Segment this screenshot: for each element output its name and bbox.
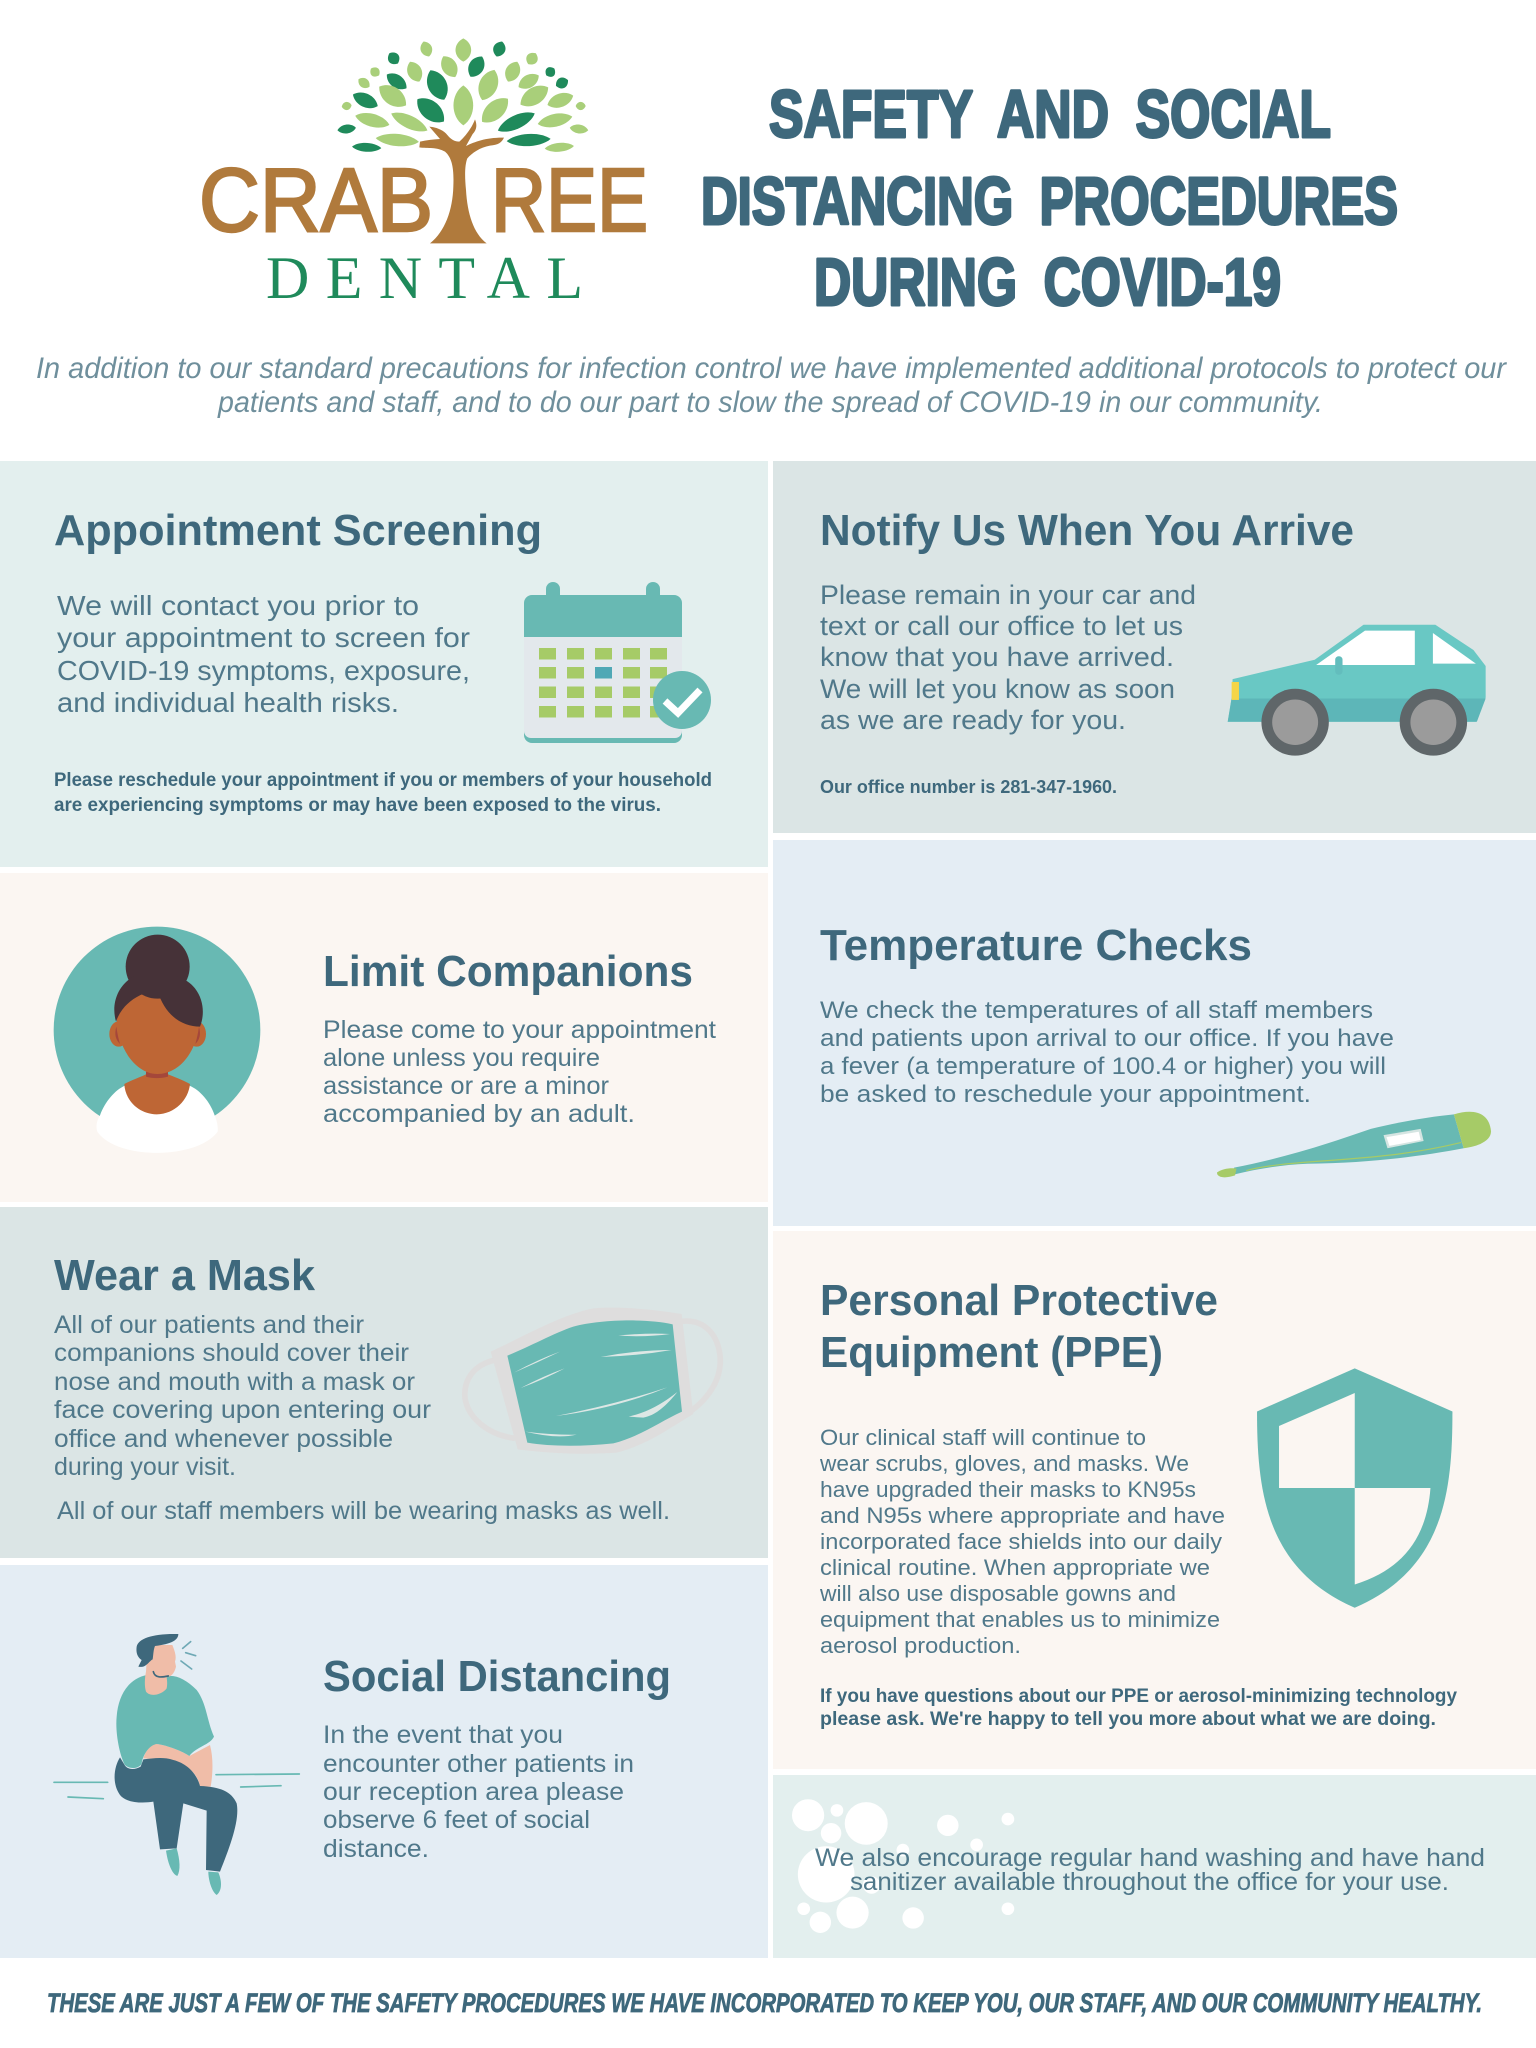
body text: and N95s where appropriate and have <box>820 1503 1225 1528</box>
body text <box>819 1425 1225 1658</box>
note text <box>820 1686 1457 1730</box>
heading <box>820 1276 1218 1377</box>
body text: equipment that enables us to minimize <box>820 1607 1220 1632</box>
icon: calendar with check mark <box>524 582 711 743</box>
body text: alone unless you require <box>323 1044 600 1072</box>
body text <box>815 1844 1485 1896</box>
title: SAFETY AND SOCIAL <box>769 77 1331 152</box>
logo: Crabtree Dental <box>199 38 648 311</box>
heading: Wear a Mask <box>54 1251 316 1300</box>
body text: face covering upon entering our <box>54 1396 431 1424</box>
title: DURING COVID-19 <box>814 245 1281 320</box>
icon: tree trunk <box>419 119 504 243</box>
icon: thermometer <box>1217 1112 1491 1177</box>
body text: during your visit. <box>54 1453 236 1481</box>
icon: woman portrait <box>54 927 260 1153</box>
body text: assistance or are a minor <box>323 1072 609 1100</box>
panel: wear a mask <box>0 1207 768 1558</box>
note text: Please reschedule your appointment if you or members of your household <box>54 770 712 791</box>
body text <box>820 580 1196 735</box>
panel: hand washing <box>773 1775 1536 1958</box>
body text: your appointment to screen for <box>57 622 470 653</box>
heading: Personal Protective <box>820 1276 1218 1325</box>
panel: temperature checks <box>773 840 1536 1226</box>
body text: We also encourage regular hand washing and have hand <box>815 1844 1485 1872</box>
body text: We check the temperatures of all staff members <box>820 997 1373 1024</box>
body text: incorporated face shields into our daily <box>820 1529 1223 1554</box>
panel: social distancing <box>0 1565 768 1958</box>
panel: limit companions <box>0 873 768 1202</box>
body text: text or call our office to let us <box>820 611 1183 641</box>
panel: appointment screening <box>0 461 768 867</box>
heading: Social Distancing <box>323 1652 671 1701</box>
body text: We will contact you prior to <box>57 590 419 621</box>
body text: wear scrubs, gloves, and masks. We <box>819 1451 1189 1476</box>
body text: know that you have arrived. <box>820 642 1174 672</box>
note text <box>54 770 712 816</box>
panel: personal protective equipment <box>773 1231 1536 1769</box>
body text: be asked to reschedule your appointment. <box>820 1081 1311 1108</box>
heading: Limit Companions <box>323 947 693 996</box>
note text: are experiencing symptoms or may have been exposed to the virus. <box>54 795 661 816</box>
office number note: Our office number is 281-347-1960. <box>820 777 1117 797</box>
icon: seated man <box>54 1634 299 1895</box>
body text <box>57 590 470 718</box>
body text: our reception area please <box>323 1778 624 1806</box>
body text: Please come to your appointment <box>323 1016 716 1044</box>
body text: We will let you know as soon <box>820 674 1175 704</box>
body text: accompanied by an adult. <box>323 1100 635 1128</box>
body text: nose and mouth with a mask or <box>54 1368 415 1396</box>
icon: tree leaves <box>337 38 589 153</box>
icon: face mask <box>465 1308 720 1454</box>
body text: a fever (a temperature of 100.4 or higher) you will <box>820 1053 1386 1080</box>
icon: shield <box>1257 1368 1452 1608</box>
body text: Our clinical staff will continue to <box>820 1425 1146 1450</box>
body text <box>323 1016 716 1128</box>
body text: clinical routine. When appropriate we <box>820 1555 1210 1580</box>
panel: notify us when you arrive <box>773 461 1536 833</box>
body text: COVID-19 symptoms, exposure, <box>57 655 470 686</box>
intro text <box>36 352 1507 419</box>
intro text: patients and staff, and to do our part to slow the spread of COVID-19 in our community. <box>217 386 1323 419</box>
body text: have upgraded their masks to KN95s <box>820 1477 1196 1502</box>
body text: observe 6 feet of social <box>323 1806 590 1834</box>
body text: All of our patients and their <box>54 1311 364 1339</box>
logo wordmark: CRABTREE <box>199 151 648 251</box>
title <box>701 77 1398 320</box>
icon: soap bubbles <box>792 1799 1014 1933</box>
body text: companions should cover their <box>54 1339 409 1367</box>
body text: office and whenever possible <box>54 1425 393 1453</box>
body text <box>54 1311 431 1481</box>
logo wordmark: CRABTREE: REE <box>491 151 648 251</box>
logo wordmark: CRABTREE: CRAB <box>199 151 433 251</box>
intro text: In addition to our standard precautions for infection control we have implemented additional protocols to protect our <box>36 352 1507 385</box>
note text: If you have questions about our PPE or aerosol-minimizing technology <box>820 1686 1457 1707</box>
body text: distance. <box>323 1835 429 1863</box>
body text: as we are ready for you. <box>820 705 1126 735</box>
body text: encounter other patients in <box>323 1750 634 1778</box>
body text: aerosol production. <box>820 1633 1021 1658</box>
icon: car <box>1228 625 1486 756</box>
heading: Notify Us When You Arrive <box>820 506 1354 555</box>
heading: Appointment Screening <box>54 506 542 555</box>
heading: Temperature Checks <box>820 921 1252 970</box>
body text: Please remain in your car and <box>820 580 1196 610</box>
body text: In the event that you <box>323 1721 563 1749</box>
note text: please ask. We're happy to tell you more about what we are doing. <box>820 1709 1436 1730</box>
body text: sanitizer available throughout the office for your use. <box>850 1868 1449 1896</box>
body text: will also use disposable gowns and <box>819 1581 1176 1606</box>
heading: Equipment (PPE) <box>820 1328 1163 1377</box>
body text: and patients upon arrival to our office. If you have <box>820 1025 1394 1052</box>
body text <box>820 997 1394 1108</box>
logo wordmark: DENTAL: DENTAL <box>266 245 583 311</box>
staff mask note: All of our staff members will be wearing masks as well. <box>57 1497 670 1525</box>
body text: and individual health risks. <box>57 687 399 718</box>
body text <box>323 1721 634 1863</box>
